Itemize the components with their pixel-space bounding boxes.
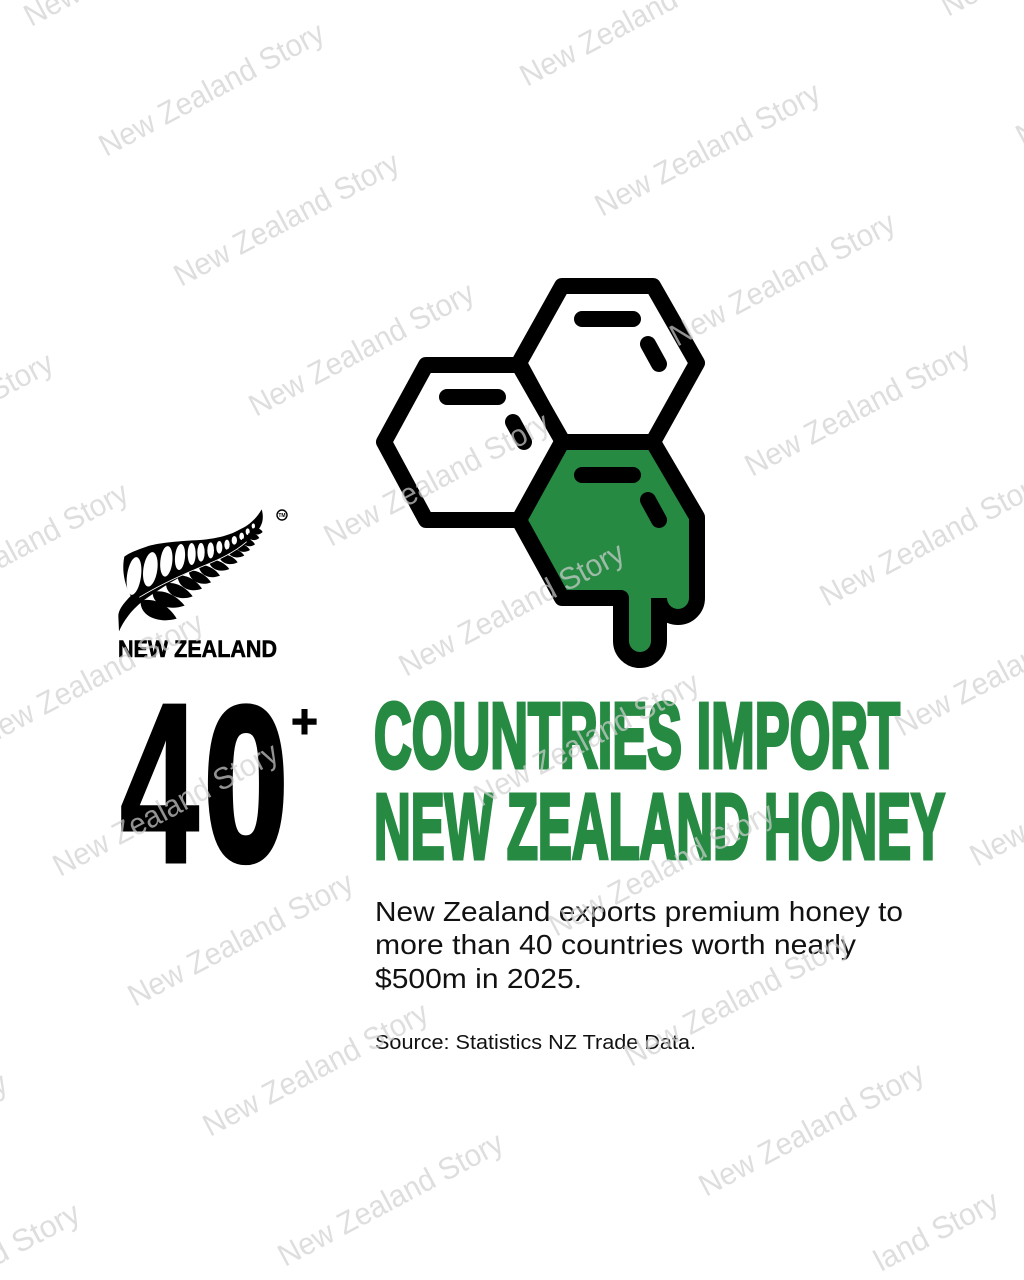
logo wordmark: NEW ZEALAND [118,636,277,663]
big number: 40+ [120,657,318,911]
heading [374,684,945,878]
watermark: repeated New Zealand Story: New Zealand Story [168,145,405,293]
watermark: repeated New Zealand Story: New Zealand Story [122,865,359,1013]
watermark: repeated New Zealand Story: New Zealand Story [243,275,480,423]
left hexagon cell [384,365,563,520]
body text: $500m in 2025. [375,963,582,994]
top hexagon cell [519,286,697,442]
body text: New Zealand exports premium honey to [375,896,903,927]
watermark: repeated New Zealand Story: New Zealand Story [664,205,901,353]
big number: 40+: 4 [120,657,199,911]
watermark: repeated New Zealand Story: land Story [868,1183,1005,1278]
watermark: repeated New Zealand Story: New Zealand Story [739,335,976,483]
watermark: repeated New Zealand Story: New Zealand Story [543,795,780,943]
watermark: repeated New Zealand Story: New Zealand Story [197,995,434,1143]
watermark: repeated New Zealand Story: New Zealand Story [393,535,630,683]
watermark: repeated New Zealand Story: New Zealand Story [93,15,330,163]
source note: Source: Statistics NZ Trade Data. [375,1031,696,1054]
watermark: repeated New Zealand Story: New Zealand Story [693,1055,930,1203]
trademark symbol: TM [278,513,286,519]
watermark: repeated New Zealand Story: New Zealand Story [272,1125,509,1273]
watermark: repeated New Zealand Story: New Zealand Story [468,665,705,813]
body text: more than 40 countries worth nearly [375,929,856,960]
fern frond [118,509,263,631]
icon: New Zealand silver fern logo [118,509,287,663]
watermark: repeated New Zealand Story: New Zealand Story [618,925,855,1073]
body text [375,896,903,994]
watermark: repeated New Zealand Story: New Zealand Story [318,405,555,553]
honey-filled hexagon cell [519,442,697,660]
watermark: repeated New Zealand Story: New Zealand Story [47,735,284,883]
big number: 40+: + [291,696,318,749]
trademark symbol [277,510,287,520]
big number: 40+: 0 [204,661,288,907]
watermark: repeated New Zealand Story: New Zealand Story [589,75,826,223]
icon: honeycomb with dripping green honey [384,286,697,660]
